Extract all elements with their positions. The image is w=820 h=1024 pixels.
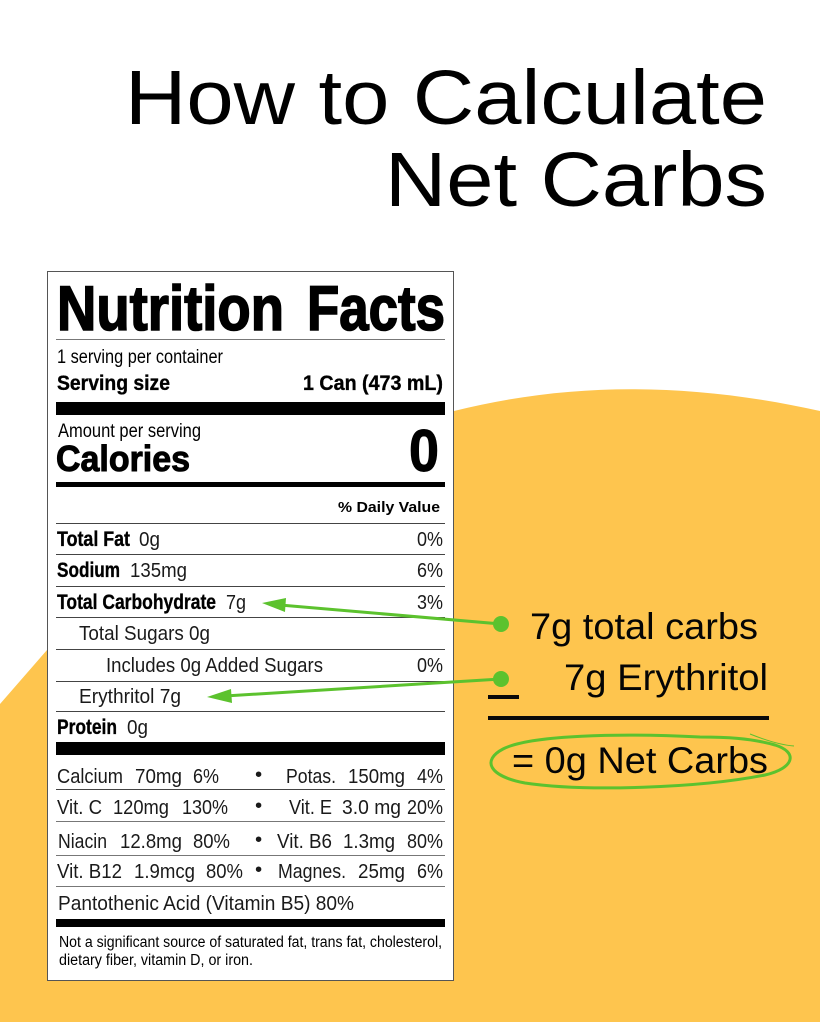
footnote (59, 934, 442, 969)
vitamin and mineral rows: 70mg (135, 765, 182, 788)
vitamin and mineral rows: 130% (182, 796, 228, 819)
vitamin and mineral rows: Vit. E (289, 796, 332, 819)
vitamin and mineral rows: 20% (407, 796, 443, 819)
nutrient rows: 0% (417, 654, 443, 677)
vitamin and mineral rows: 80% (193, 830, 230, 853)
arrow: erythritol to label row (207, 671, 509, 703)
vitamin and mineral rows (56, 763, 445, 915)
vitamin and mineral rows: 12.8mg (120, 830, 182, 853)
title: Net Carbs (385, 137, 767, 223)
nutrient rows: 6% (417, 559, 443, 582)
nutrient rows: Total Fat (57, 528, 130, 551)
vitamin and mineral rows: Calcium (57, 765, 123, 788)
serving information: 1 Can (473 mL) (303, 372, 443, 395)
calories section: 0 (409, 418, 439, 484)
arrow: total carbs to label row (262, 598, 509, 632)
vitamin and mineral rows: Magnes. (278, 860, 346, 883)
nutrient rows: 3% (417, 591, 443, 614)
vitamin and mineral rows: Potas. (286, 765, 336, 788)
vitamin and mineral rows: Niacin (58, 830, 107, 853)
vitamin and mineral rows: 3.0 mg (342, 796, 401, 819)
daily value header: % Daily Value (338, 499, 440, 516)
heading: nutrition facts: Nutrition (57, 274, 284, 344)
vitamin and mineral rows: 1.3mg (343, 830, 395, 853)
equation rule (488, 716, 769, 720)
nutrient rows (57, 528, 443, 739)
vitamin and mineral rows: 25mg (358, 860, 405, 883)
vitamin and mineral rows: • (255, 858, 262, 881)
footnote: dietary fiber, vitamin D, or iron. (59, 952, 253, 969)
vitamin and mineral rows: 150mg (348, 765, 405, 788)
vitamin and mineral rows: Vit. B6 (277, 830, 332, 853)
heading: nutrition facts (57, 274, 445, 344)
calories section: Amount per serving (58, 421, 201, 442)
equation: minus erythritol: 7g Erythritol (564, 657, 768, 698)
vitamin and mineral rows: 6% (417, 860, 443, 883)
serving information: Serving size (57, 372, 170, 395)
vitamin and mineral rows: 4% (417, 765, 443, 788)
vitamin and mineral rows: 1.9mcg (134, 860, 195, 883)
nutrient rows: 7g (226, 591, 246, 614)
nutrient rows: Sodium (57, 559, 120, 582)
heading: nutrition facts: Facts (307, 274, 445, 344)
serving information: 1 serving per container (57, 347, 224, 368)
vitamin and mineral rows: 80% (206, 860, 243, 883)
thick divider (56, 742, 445, 755)
nutrient rows: 0% (417, 528, 443, 551)
vitamin and mineral rows: 120mg (113, 796, 169, 819)
result: net carbs circled (491, 734, 794, 788)
panel: nutrition facts label (48, 272, 454, 980)
footnote: Not a significant source of saturated fat, trans fat, cholesterol, (59, 934, 442, 951)
vitamin and mineral rows: • (255, 763, 262, 786)
thick divider (56, 402, 445, 415)
serving information (56, 339, 445, 395)
vitamin and mineral rows: 80% (407, 830, 443, 853)
vitamin and mineral rows: • (255, 794, 262, 817)
calories section: Calories (56, 438, 190, 479)
vitamin and mineral rows: 6% (193, 765, 219, 788)
calories section (56, 418, 439, 484)
title (125, 55, 767, 223)
nutrient rows: 135mg (130, 559, 187, 582)
nutrient rows: Erythritol 7g (79, 685, 181, 708)
title: How to Calculate (125, 55, 767, 141)
vitamin and mineral rows: • (255, 828, 262, 851)
equation: minus erythritol (488, 657, 768, 699)
vitamin and mineral rows: Vit. B12 (57, 860, 122, 883)
nutrient rows: 0g (139, 528, 160, 551)
thick divider (56, 919, 445, 927)
yellow background shape (0, 389, 820, 1022)
nutrient rows: 0g (127, 716, 148, 739)
result: net carbs circled: = 0g Net Carbs (512, 740, 768, 781)
nutrient rows: Includes 0g Added Sugars (106, 654, 323, 677)
nutrient rows: Protein (57, 716, 117, 739)
row dividers (56, 523, 445, 712)
nutrient rows: Total Sugars 0g (79, 622, 210, 645)
equation: total carbs: 7g total carbs (530, 606, 758, 647)
nutrient rows: Total Carbohydrate (57, 591, 216, 614)
vitamin and mineral rows: Vit. C (57, 796, 102, 819)
vitamin and mineral rows: Pantothenic Acid (Vitamin B5) 80% (58, 892, 354, 915)
